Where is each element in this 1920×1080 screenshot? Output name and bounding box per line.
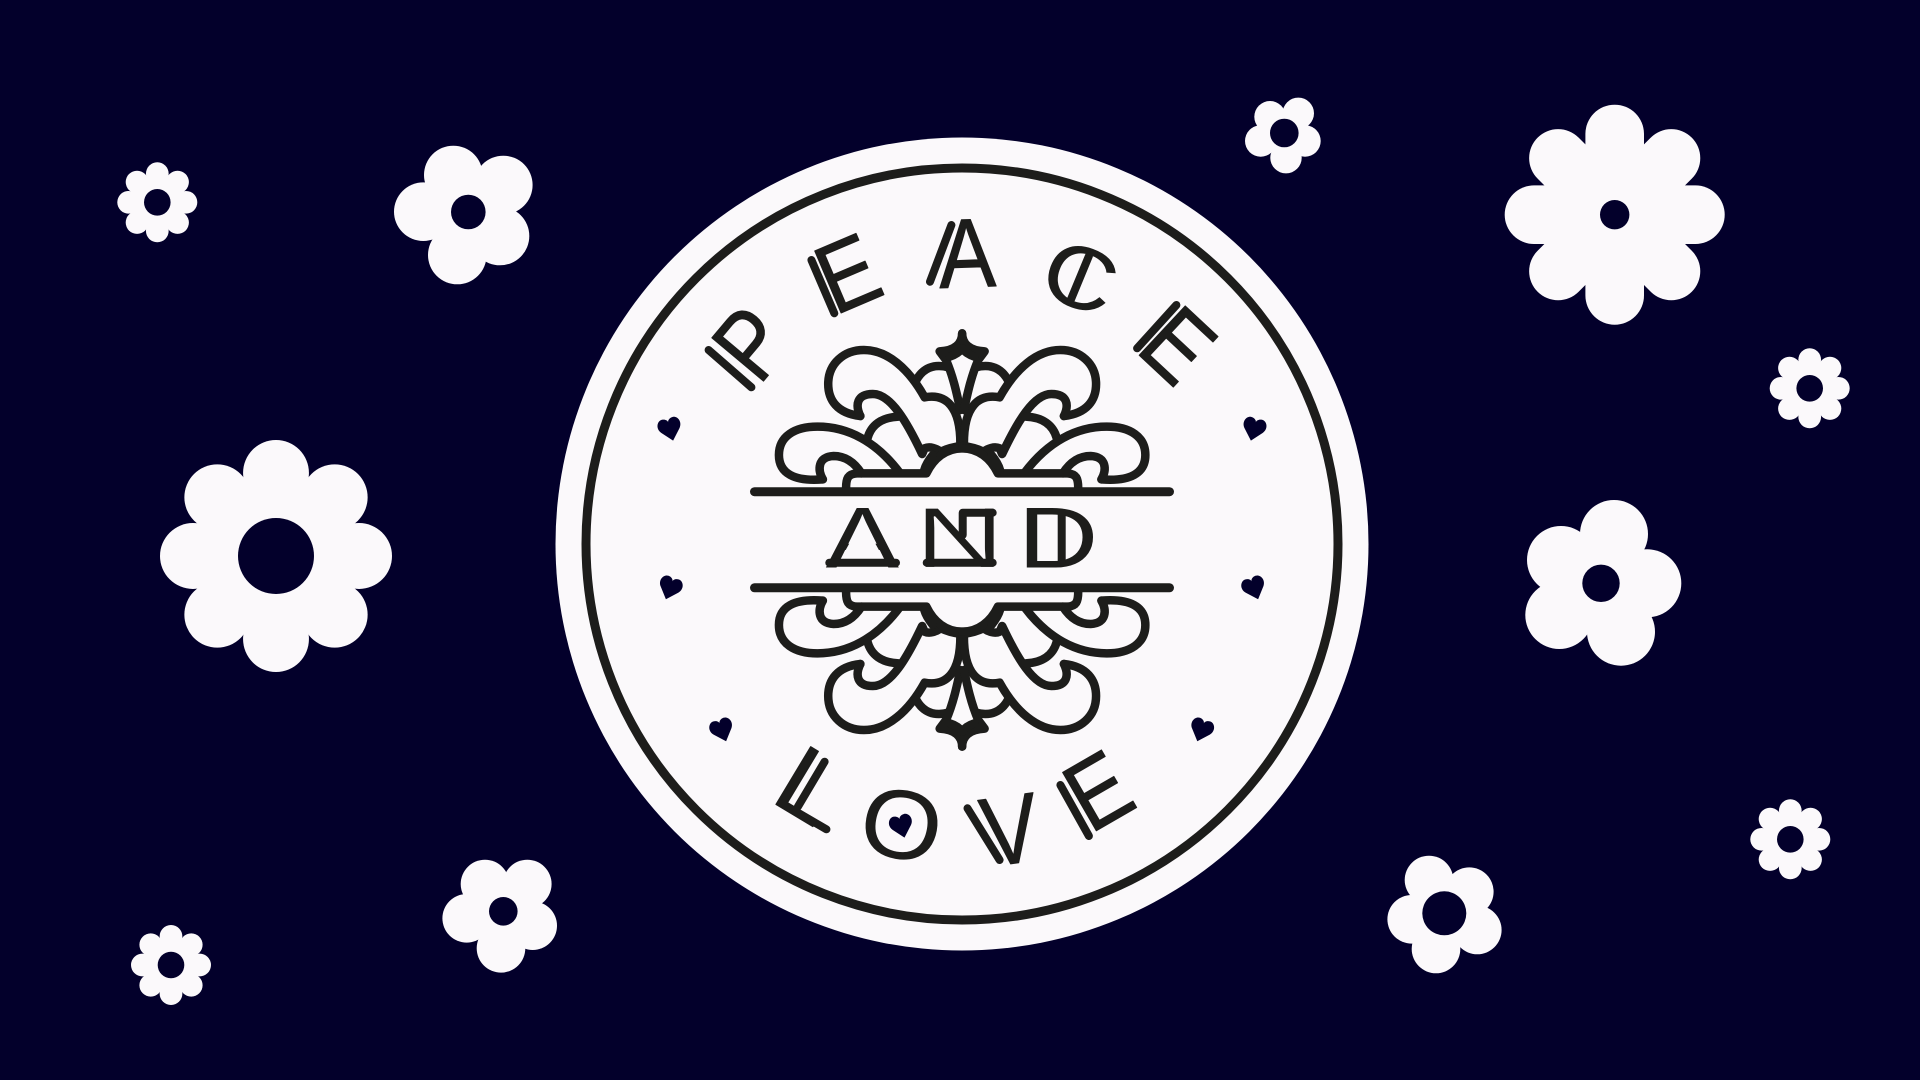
ornament: upper flourish	[779, 333, 1145, 488]
letter L: L	[758, 724, 862, 846]
letter O with heart: O	[852, 763, 951, 886]
flower: five petals top left	[394, 146, 533, 284]
heart middle left	[655, 574, 685, 603]
flower: five petals bottom left	[442, 860, 557, 973]
word: AND	[826, 489, 1098, 586]
flower: small top left	[117, 162, 197, 242]
letter A as triangle: A	[826, 490, 899, 586]
badge ring	[586, 168, 1338, 920]
letter E: E	[1046, 728, 1151, 853]
flower: five petals top centre	[1245, 98, 1321, 173]
heart upper right	[1240, 415, 1268, 444]
flower: large left eight petals	[160, 440, 392, 672]
central badge	[556, 138, 1368, 950]
flower: five petals bottom right	[1387, 856, 1502, 973]
heart upper left	[656, 415, 684, 444]
badge disc	[556, 138, 1368, 950]
letter A: A	[937, 199, 998, 309]
heart lower right	[1186, 716, 1216, 745]
heart lower left	[707, 716, 737, 745]
hearts around the badge	[655, 415, 1269, 745]
letter C: C	[1029, 219, 1131, 337]
word: LOVE	[758, 724, 1151, 888]
letter E: E	[800, 211, 896, 335]
letter N with square: N	[915, 489, 1005, 586]
flower: small right upper	[1770, 348, 1850, 428]
letter P: P	[692, 287, 811, 400]
heading word: PEACE	[692, 199, 1237, 405]
heart middle right	[1239, 574, 1269, 603]
letter D with stem: D	[1018, 491, 1098, 586]
ornament: lower flourish	[779, 592, 1145, 747]
flower: large top right eight petals	[1505, 105, 1725, 325]
flower: five petals right	[1525, 500, 1681, 666]
lower divider line	[754, 583, 1170, 592]
flower: small bottom left	[131, 925, 211, 1005]
flower: small right lower	[1750, 799, 1830, 879]
upper divider line	[754, 487, 1170, 496]
letter V: V	[974, 773, 1046, 888]
letter E: E	[1119, 285, 1237, 405]
